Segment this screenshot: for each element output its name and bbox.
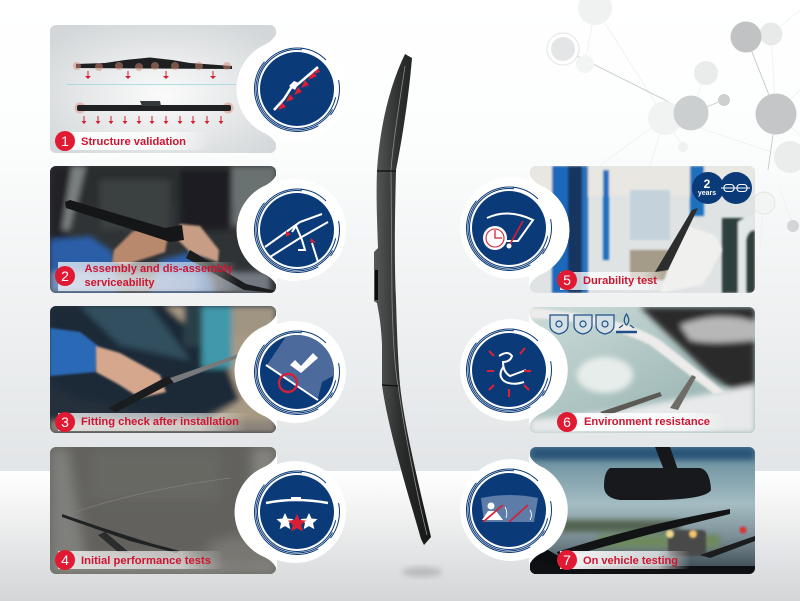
blade with pressure points, top [73,58,232,79]
environment icons [550,314,637,334]
number badge 5: 5 [563,272,571,288]
number badge 1: 1 [61,133,69,149]
panel 7: on vehicle testing [530,447,755,574]
label [84,263,233,289]
panel 2: assembly serviceability [50,166,276,293]
label strip [60,132,210,150]
number badge 2 [55,266,75,286]
divider line [67,84,236,86]
panel 1: structure validation [50,25,276,153]
label strip [560,413,725,431]
label: Structure validation [81,136,186,148]
label: Environment resistance [584,416,710,428]
number badge 7: 7 [563,552,571,568]
panel 3: fitting check [50,306,276,433]
icon: performance stars [235,454,355,570]
panel 6: environment resistance [530,307,755,433]
label: Fitting check after installation [81,416,239,428]
label strip [58,551,223,569]
label strip [560,551,690,569]
label strip [58,262,238,291]
badge: 2 years and chain: 2 [704,177,711,191]
badge: 2 years and chain [692,172,752,204]
panel 4: initial performance tests [50,447,285,574]
number badge 3 [55,412,75,432]
icon: environment [451,312,568,428]
molecule network decoration [547,0,800,250]
icon: durability [451,170,570,287]
label: Durability test [583,275,657,287]
wiper blade product image [374,54,442,577]
icon: on vehicle testing [451,452,568,568]
number badge 4: 4 [61,552,69,568]
label strip [58,413,248,431]
panel 5: durability test [530,166,755,293]
number badge 3: 3 [61,414,69,430]
number badge 6: 6 [563,414,571,430]
number badge 5 [557,270,577,290]
icon: structure [236,31,355,147]
label: serviceability [84,277,154,289]
number badge 1 [55,131,75,151]
badge: 2 years and chain: years [698,190,716,197]
label: Assembly and dis-assembly [84,263,233,275]
label strip [560,272,670,290]
number badge 4 [55,550,75,570]
label: On vehicle testing [583,555,678,567]
number badge 6 [557,412,577,432]
number badge 2: 2 [61,268,69,284]
number badge 7 [557,550,577,570]
label: Initial performance tests [81,555,211,567]
icon: fitting check [235,313,355,430]
blade with pressure points, bottom [74,101,234,124]
icon: assembly [236,172,355,288]
